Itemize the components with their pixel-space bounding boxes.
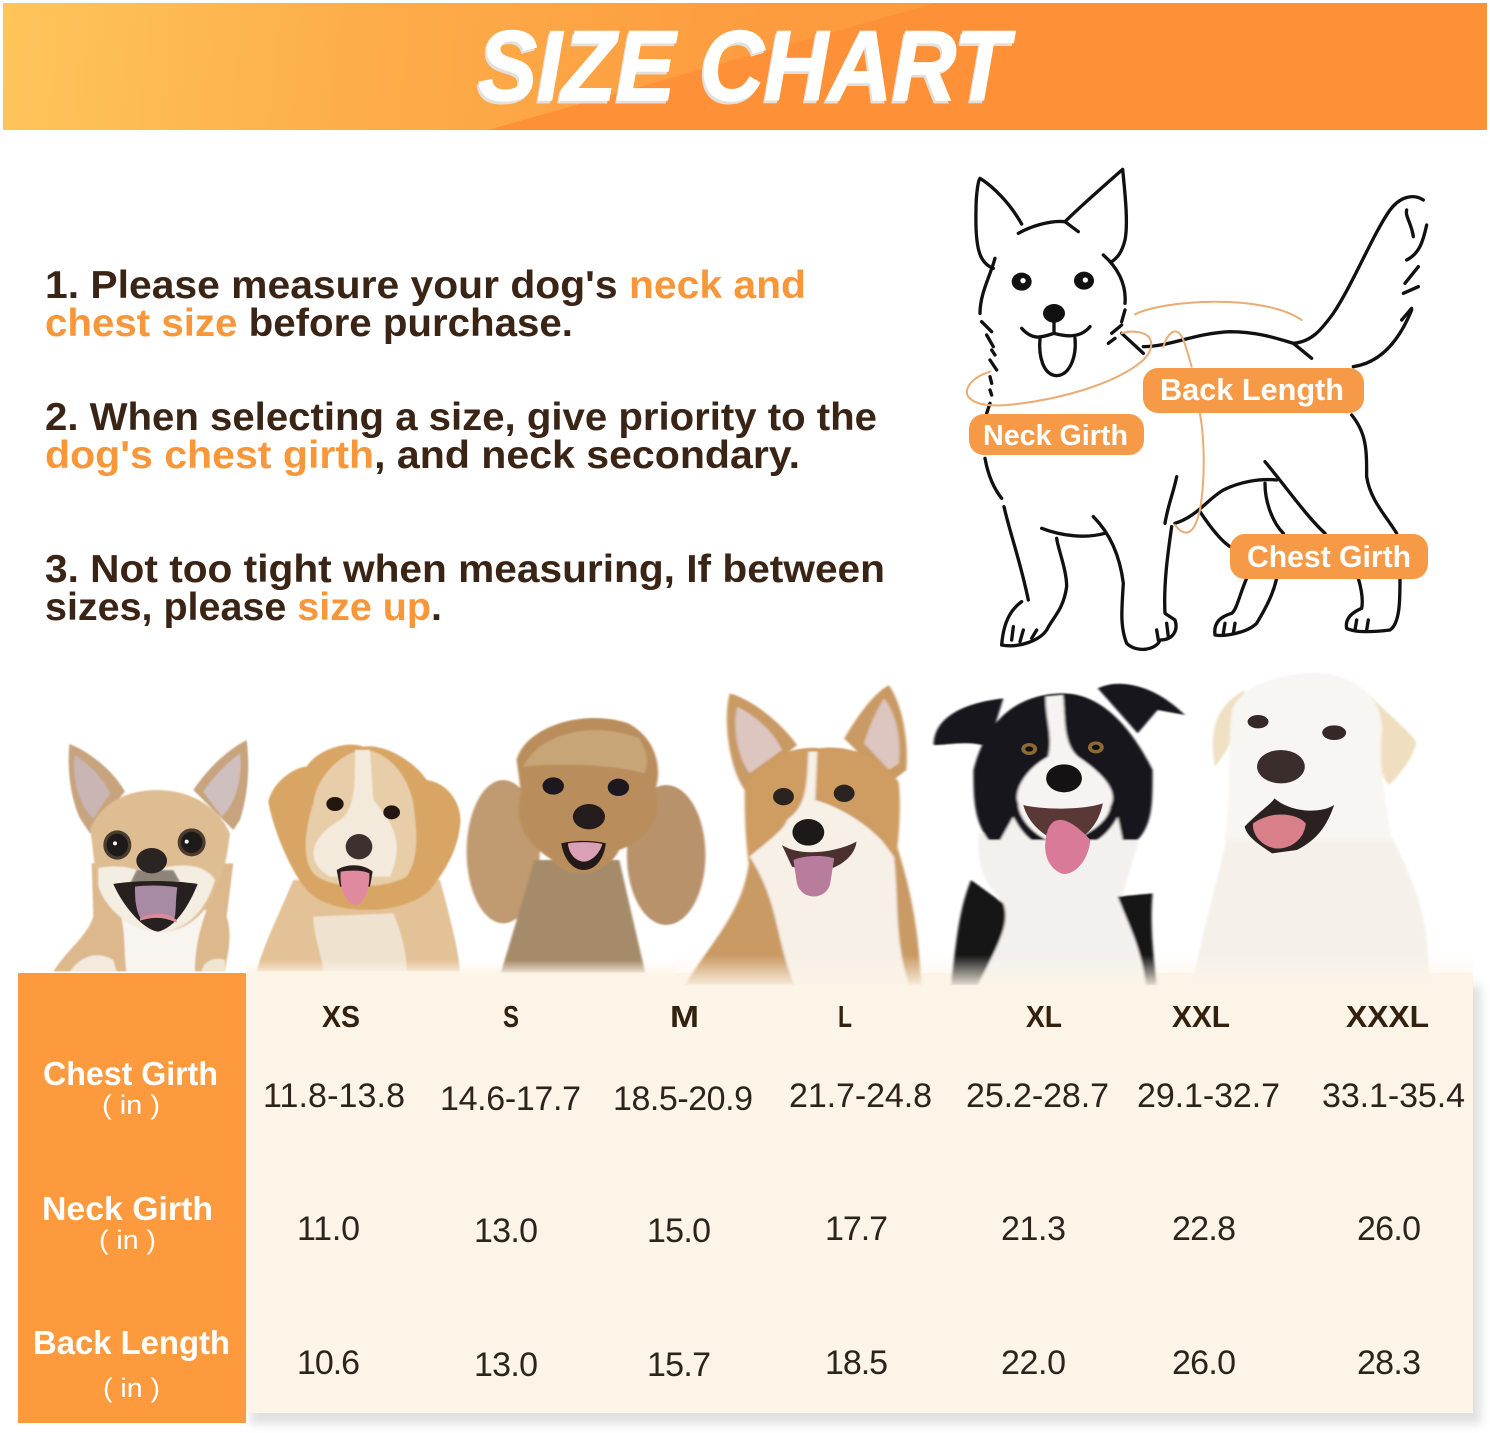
table header: sizes: XXXL xyxy=(1346,999,1429,1034)
dog outline xyxy=(976,169,1427,649)
instructions text block xyxy=(45,264,885,629)
eyes and nose xyxy=(1012,272,1094,323)
instruction 1: chest size before purchase. xyxy=(45,302,573,345)
label: neck girth xyxy=(969,414,1144,455)
instruction 2: dog's chest girth , and neck secondary. xyxy=(45,434,800,477)
table header: sizes xyxy=(322,999,1429,1034)
row header column xyxy=(18,973,246,1423)
table row: back length values: 22.0 xyxy=(1001,1344,1066,1382)
photo fade into table xyxy=(676,955,1473,989)
instruction 1: 1. Please measure your dog's neck and xyxy=(45,264,806,307)
row label: back length: Back Length xyxy=(33,1324,230,1361)
table row: back length values: 28.3 xyxy=(1357,1344,1421,1382)
dog: border collie xyxy=(934,684,1185,985)
table row: chest girth values: 29.1-32.7 xyxy=(1137,1077,1280,1115)
table row: neck girth values: 11.0 xyxy=(297,1210,360,1248)
table row: back length values: 10.6 xyxy=(297,1344,360,1382)
instruction 2 xyxy=(45,396,877,477)
row label: back length: ( in ) xyxy=(103,1373,160,1403)
row label: back length xyxy=(33,1324,230,1403)
instruction 3: sizes, please size up. xyxy=(45,586,442,629)
table header: sizes: XL xyxy=(1026,999,1062,1034)
dog: poodle xyxy=(467,718,705,973)
table header: sizes: XXL xyxy=(1172,999,1230,1034)
table row: chest girth values: 11.8-13.8 xyxy=(263,1077,405,1115)
table header: sizes: S xyxy=(503,999,519,1034)
table row: back length values: 18.5 xyxy=(825,1344,888,1382)
label: back length xyxy=(1143,368,1364,413)
dog: havanese xyxy=(257,745,461,971)
table row: chest girth values: 18.5-20.9 xyxy=(613,1080,753,1118)
measuring lines xyxy=(967,302,1302,533)
photo fade under small dogs xyxy=(246,960,676,976)
label: back length: Back Length xyxy=(1160,372,1344,407)
table row: back length values: 26.0 xyxy=(1172,1344,1236,1382)
table row: neck girth values: 26.0 xyxy=(1357,1210,1421,1248)
table row: chest girth values: 33.1-35.4 xyxy=(1322,1077,1465,1115)
table row: back length values xyxy=(297,1344,1421,1384)
table header: sizes: XS xyxy=(322,999,360,1034)
table header: sizes: L xyxy=(838,999,852,1034)
row label: chest girth: ( in ) xyxy=(102,1090,160,1120)
label: neck girth: Neck Girth xyxy=(983,420,1128,452)
table body background xyxy=(246,973,1473,1413)
title: SIZE CHART xyxy=(476,13,1014,124)
instruction 3 xyxy=(45,548,885,629)
row label: neck girth: Neck Girth xyxy=(42,1190,213,1227)
table row: neck girth values: 21.3 xyxy=(1001,1210,1066,1248)
title: SIZE CHART xyxy=(478,10,1016,121)
dog: labrador xyxy=(1192,673,1429,985)
table row: neck girth values: 13.0 xyxy=(474,1212,538,1250)
row label: neck girth xyxy=(42,1190,213,1255)
instruction 3: 3. Not too tight when measuring, If between xyxy=(45,548,885,591)
table row: chest girth values: 25.2-28.7 xyxy=(966,1077,1109,1115)
label: chest girth: Chest Girth xyxy=(1247,539,1411,574)
table row: chest girth values: 14.6-17.7 xyxy=(440,1080,581,1118)
table row: chest girth values: 21.7-24.8 xyxy=(789,1077,932,1115)
dog: chihuahua xyxy=(53,740,248,971)
row label: chest girth: Chest Girth xyxy=(43,1055,218,1092)
table row: back length values: 13.0 xyxy=(474,1346,538,1384)
row label: chest girth xyxy=(43,1055,218,1120)
instruction 2: 2. When selecting a size, give priority to the xyxy=(45,396,877,439)
dog: corgi xyxy=(685,685,921,985)
label: chest girth xyxy=(1230,534,1428,579)
instruction 1 xyxy=(45,264,806,345)
table shadow xyxy=(250,985,1481,1424)
table row: neck girth values xyxy=(297,1210,1421,1250)
dog photo row xyxy=(53,673,1473,989)
table header: sizes: M xyxy=(670,999,699,1034)
table row: neck girth values: 22.8 xyxy=(1172,1210,1236,1248)
header banner xyxy=(3,3,1487,130)
table row: neck girth values: 17.7 xyxy=(825,1210,888,1248)
table row: neck girth values: 15.0 xyxy=(647,1212,711,1250)
table row: back length values: 15.7 xyxy=(647,1346,711,1384)
row label: neck girth: ( in ) xyxy=(99,1225,156,1255)
measuring diagram: line-art dog xyxy=(967,169,1428,649)
table row: chest girth values xyxy=(263,1077,1465,1118)
